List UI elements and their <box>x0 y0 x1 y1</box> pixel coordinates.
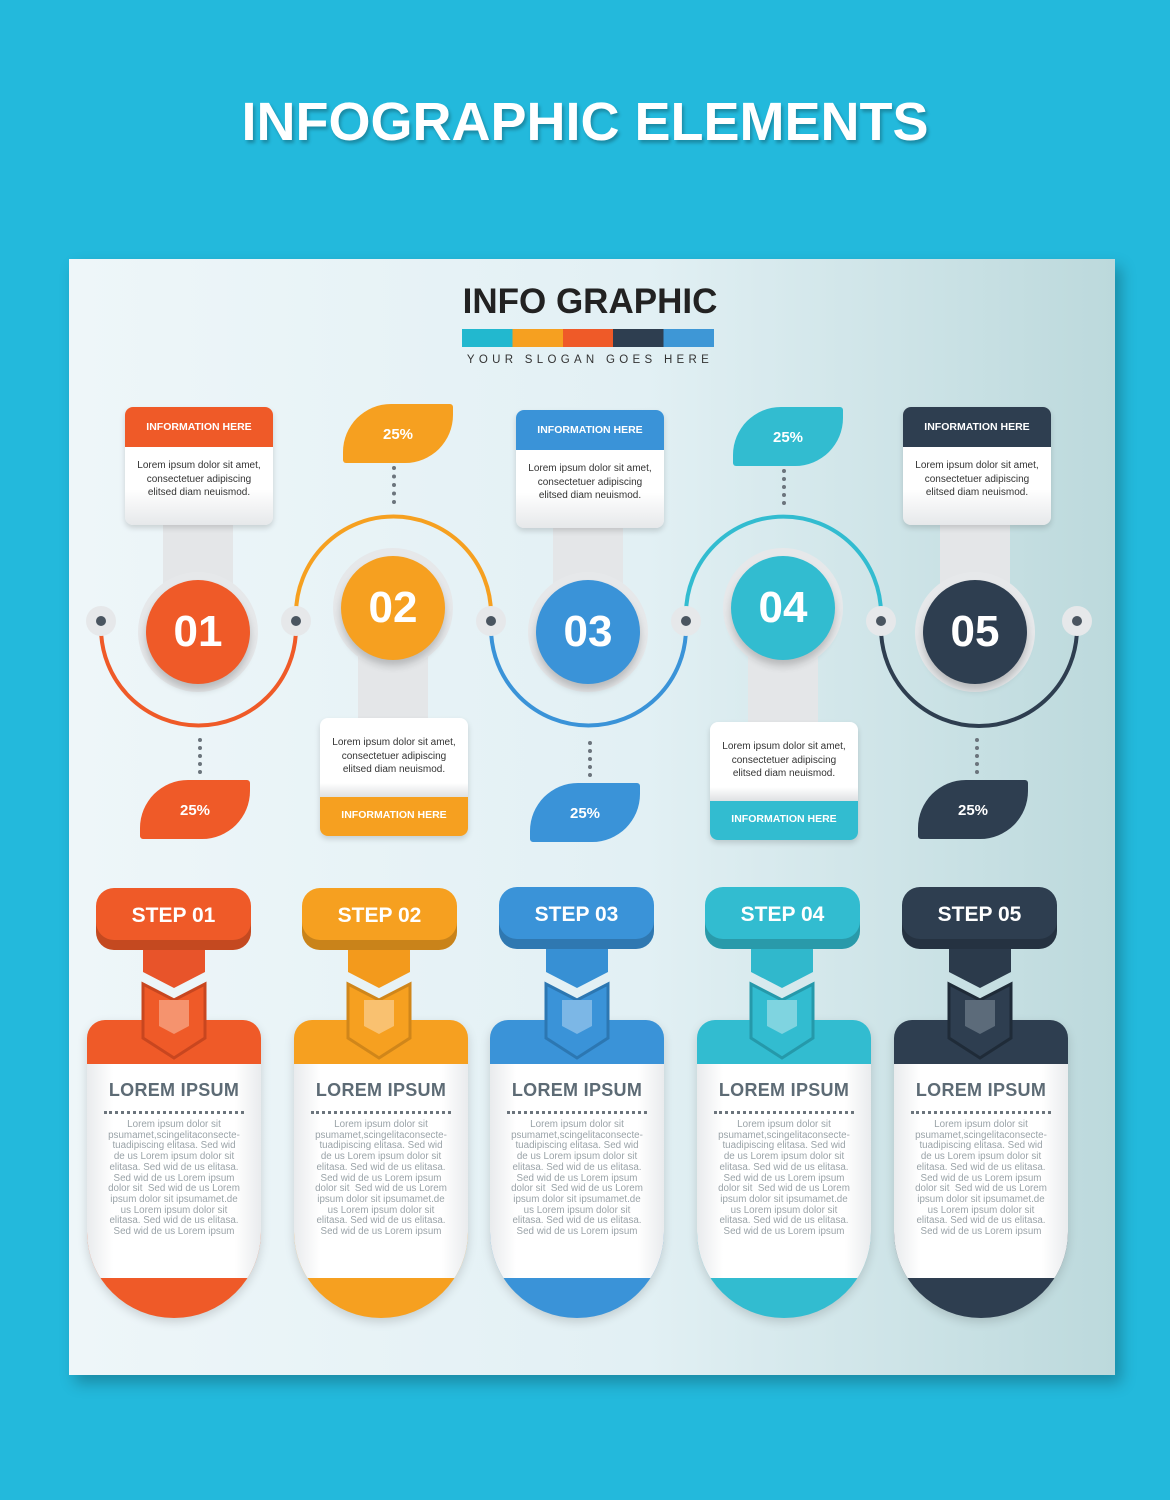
card 03: LOREM IPSUM <box>512 1080 642 1100</box>
card 05: Sed wid de us Lorem ipsum <box>921 1226 1041 1237</box>
leaf 02 <box>343 404 453 463</box>
card 05: LOREM IPSUM <box>916 1080 1046 1100</box>
card 05: elitasa. Sed wid de us elitasa. <box>916 1215 1046 1226</box>
circle 03: 03 <box>564 607 612 656</box>
card 04: ipsum dolor sit ipsumamet.de <box>720 1194 848 1205</box>
card 04: tuadipiscing elitasa. Sed wid <box>722 1140 846 1151</box>
info box 01: INFORMATION HERE <box>146 421 252 433</box>
card 01: psumamet,scingelitaconsecte- <box>108 1130 240 1141</box>
leaf 03 <box>530 783 640 842</box>
card 02: de us Lorem ipsum dolor sit <box>321 1151 441 1162</box>
card 04: elitasa. Sed wid de us elitasa. <box>719 1215 849 1226</box>
card 04: Lorem ipsum dolor sit <box>737 1119 831 1130</box>
card 05: psumamet,scingelitaconsecte- <box>915 1130 1047 1141</box>
card 03: us Lorem ipsum dolor sit <box>524 1205 630 1216</box>
info box 04: INFORMATION HERE <box>731 813 837 825</box>
title: INFOGRAPHIC ELEMENTS <box>241 92 929 152</box>
info box 02: elitsed diam neuismod. <box>343 764 445 775</box>
leaf 03: 25% <box>570 805 600 822</box>
info box 03: consectetuer adipiscing <box>538 476 642 488</box>
step 01 header <box>96 888 251 950</box>
slogan: YOUR SLOGAN GOES HERE <box>467 354 713 366</box>
circle 02: 02 <box>369 583 417 632</box>
circle 01: 01 <box>174 607 222 656</box>
info box 04: consectetuer adipiscing <box>732 754 836 766</box>
info box 01: Lorem ipsum dolor sit amet, <box>137 460 261 471</box>
card 05: ipsum dolor sit ipsumamet.de <box>917 1194 1045 1205</box>
card 02: Sed wid de us Lorem ipsum <box>321 1226 441 1237</box>
info box 01 <box>125 407 273 525</box>
leaf 05 <box>918 780 1028 839</box>
card 04: dolor sit Sed wid de us Lorem <box>718 1183 850 1194</box>
card 02: Lorem ipsum dolor sit <box>334 1119 428 1130</box>
card 01: ipsum dolor sit ipsumamet.de <box>110 1194 238 1205</box>
card 04: LOREM IPSUM <box>719 1080 849 1100</box>
step 03 header <box>499 887 654 949</box>
info box 05 <box>903 407 1051 525</box>
leaf 01 <box>140 780 250 839</box>
card 04: Sed wid de us Lorem ipsum <box>724 1173 844 1184</box>
card 03: de us Lorem ipsum dolor sit <box>517 1151 637 1162</box>
step 04 header: STEP 04 <box>741 903 824 926</box>
leaf 04 <box>733 407 843 466</box>
info box 05: Lorem ipsum dolor sit amet, <box>915 460 1039 471</box>
card 03: elitasa. Sed wid de us elitasa. <box>512 1215 642 1226</box>
card 02: us Lorem ipsum dolor sit <box>328 1205 434 1216</box>
card 05 <box>894 1020 1068 1318</box>
info box 03 <box>516 410 664 528</box>
step 02 header <box>302 888 457 950</box>
color bar <box>462 329 714 347</box>
info box 04 <box>710 722 858 840</box>
card 01: elitasa. Sed wid de us elitasa. <box>109 1215 239 1226</box>
card 01: tuadipiscing elitasa. Sed wid <box>112 1140 236 1151</box>
panel heading <box>462 282 717 366</box>
card 05: Lorem ipsum dolor sit <box>934 1119 1028 1130</box>
card 05: de us Lorem ipsum dolor sit <box>921 1151 1041 1162</box>
card 03: Sed wid de us Lorem ipsum <box>517 1173 637 1184</box>
info box 03: INFORMATION HERE <box>537 424 643 436</box>
step 02 header: STEP 02 <box>338 904 421 927</box>
card 04 <box>697 1020 871 1318</box>
info box 04: elitsed diam neuismod. <box>733 768 835 779</box>
card 02: ipsum dolor sit ipsumamet.de <box>317 1194 445 1205</box>
card 03: Lorem ipsum dolor sit <box>530 1119 624 1130</box>
card 05: us Lorem ipsum dolor sit <box>928 1205 1034 1216</box>
card 04: us Lorem ipsum dolor sit <box>731 1205 837 1216</box>
halos <box>138 572 258 692</box>
card 03: Sed wid de us Lorem ipsum <box>517 1226 637 1237</box>
card 03: ipsum dolor sit ipsumamet.de <box>513 1194 641 1205</box>
card 02: dolor sit Sed wid de us Lorem <box>315 1183 447 1194</box>
card 05: tuadipiscing elitasa. Sed wid <box>919 1140 1043 1151</box>
necks <box>163 520 233 600</box>
circle 04 <box>731 556 835 660</box>
heading text: INFO GRAPHIC <box>463 282 717 321</box>
circle 01 <box>146 580 250 684</box>
card 03: elitasa. Sed wid de us elitasa. <box>512 1162 642 1173</box>
circle 02 <box>341 556 445 660</box>
circle 05: 05 <box>951 607 999 656</box>
card 02: LOREM IPSUM <box>316 1080 446 1100</box>
info box 05: consectetuer adipiscing <box>925 474 1029 484</box>
card 01: us Lorem ipsum dolor sit <box>121 1205 227 1216</box>
info box 02: Lorem ipsum dolor sit amet, <box>332 737 456 748</box>
card 01: dolor sit Sed wid de us Lorem <box>108 1183 240 1194</box>
info box 05: INFORMATION HERE <box>924 421 1030 433</box>
circle 04: 04 <box>759 583 807 632</box>
card 04: Sed wid de us Lorem ipsum <box>724 1226 844 1237</box>
card 05: elitasa. Sed wid de us elitasa. <box>916 1162 1046 1173</box>
step 05 header: STEP 05 <box>938 903 1021 926</box>
info box 03: Lorem ipsum dolor sit amet, <box>528 463 652 474</box>
step 01 header: STEP 01 <box>132 904 215 927</box>
card 03: psumamet,scingelitaconsecte- <box>511 1130 643 1141</box>
card 03: dolor sit Sed wid de us Lorem <box>511 1183 643 1194</box>
card 01: Lorem ipsum dolor sit <box>127 1119 221 1130</box>
card 05: dolor sit Sed wid de us Lorem <box>915 1183 1047 1194</box>
circle 03 <box>536 580 640 684</box>
info box 04: Lorem ipsum dolor sit amet, <box>722 741 846 752</box>
card 03: tuadipiscing elitasa. Sed wid <box>515 1140 639 1151</box>
info box 02: consectetuer adipiscing <box>342 750 446 762</box>
card 02: Sed wid de us Lorem ipsum <box>321 1173 441 1184</box>
card 01: Sed wid de us Lorem ipsum <box>114 1173 234 1184</box>
panel: infographic <box>69 259 1115 1375</box>
info box 01: elitsed diam neuismod. <box>148 487 250 498</box>
info box 02 <box>320 718 468 836</box>
card 02: tuadipiscing elitasa. Sed wid <box>319 1140 443 1151</box>
card 02: elitasa. Sed wid de us elitasa. <box>316 1162 446 1173</box>
step 04 header <box>705 887 860 949</box>
card 04: de us Lorem ipsum dolor sit <box>724 1151 844 1162</box>
leaf 04: 25% <box>773 429 803 446</box>
info box 01: consectetuer adipiscing <box>147 474 251 484</box>
card 05: Sed wid de us Lorem ipsum <box>921 1173 1041 1184</box>
card 03 <box>490 1020 664 1318</box>
circle 05 <box>923 580 1027 684</box>
info box 03: elitsed diam neuismod. <box>539 490 641 501</box>
card 01 <box>87 1020 261 1318</box>
info box 05: elitsed diam neuismod. <box>926 487 1028 498</box>
dotted connectors <box>198 738 202 774</box>
card 04: psumamet,scingelitaconsecte- <box>718 1130 850 1141</box>
leaf 02: 25% <box>383 426 413 443</box>
card 02 <box>294 1020 468 1318</box>
card 01: Sed wid de us Lorem ipsum <box>114 1226 234 1237</box>
step 03 header: STEP 03 <box>535 903 618 926</box>
leaf 05: 25% <box>958 802 988 819</box>
leaf 01: 25% <box>180 802 210 819</box>
card 02: psumamet,scingelitaconsecte- <box>315 1130 447 1141</box>
step 05 header <box>902 887 1057 949</box>
info box 02: INFORMATION HERE <box>341 809 447 821</box>
card 02: elitasa. Sed wid de us elitasa. <box>316 1215 446 1226</box>
card 01: elitasa. Sed wid de us elitasa. <box>109 1162 239 1173</box>
card 04: elitasa. Sed wid de us elitasa. <box>719 1162 849 1173</box>
card 01: de us Lorem ipsum dolor sit <box>114 1151 234 1162</box>
card 01: LOREM IPSUM <box>109 1080 239 1100</box>
